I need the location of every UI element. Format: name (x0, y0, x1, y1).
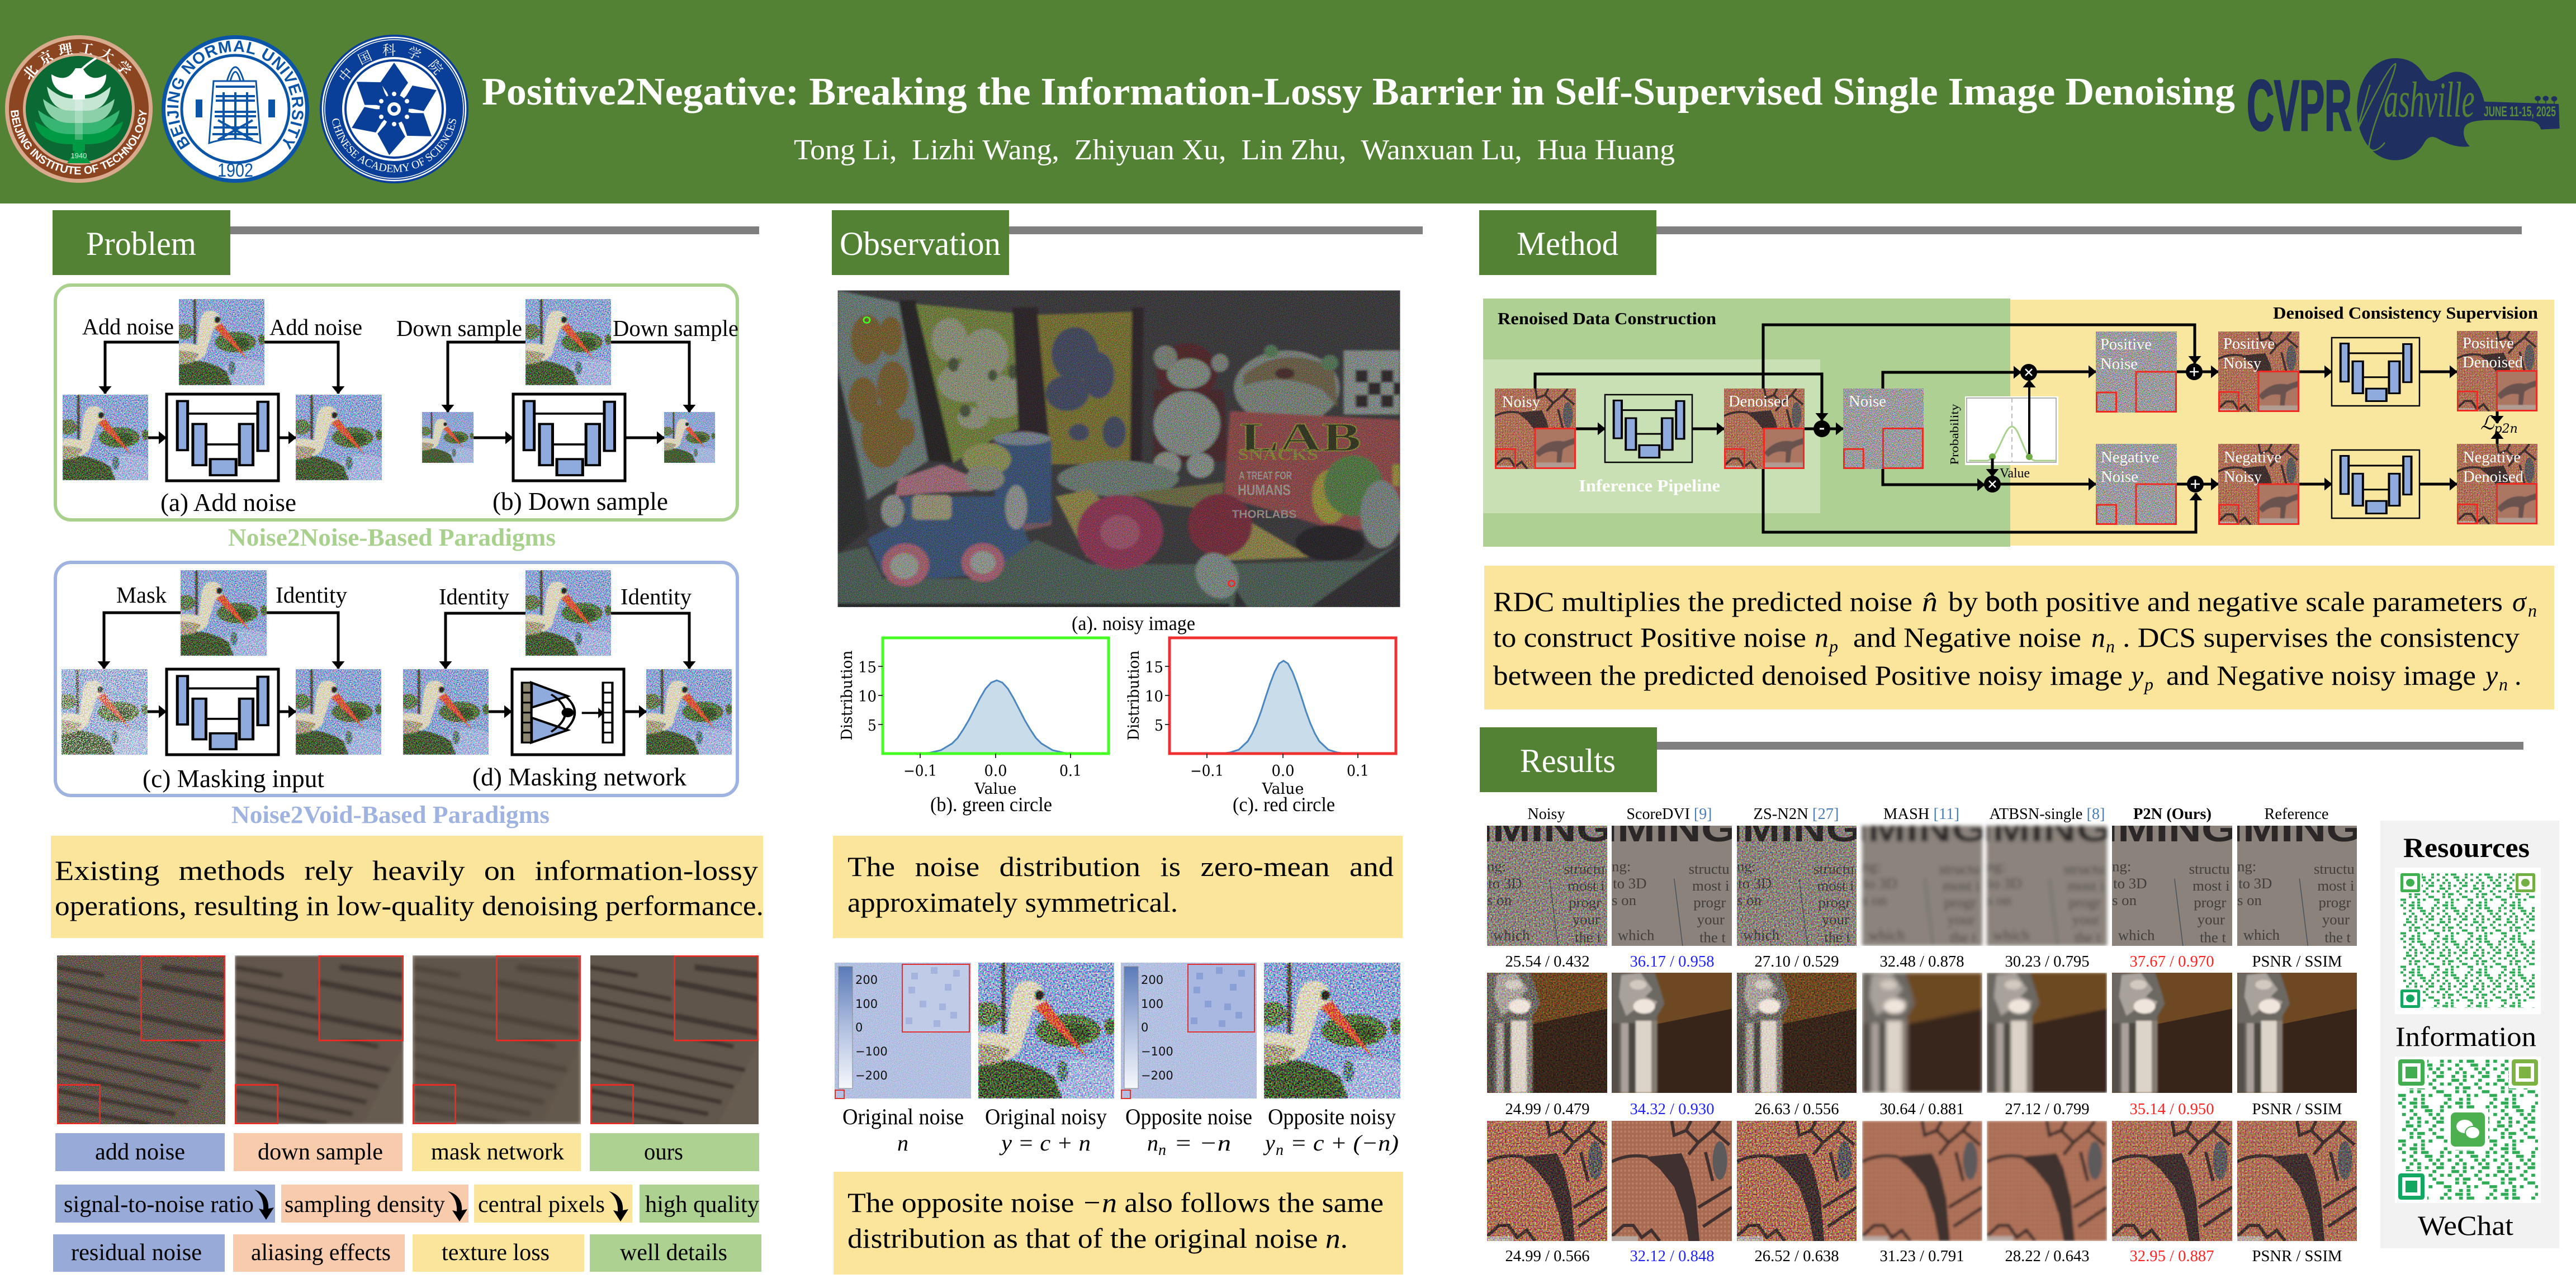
results row 2: screw (1487, 973, 2357, 1118)
QR code: WeChat (2395, 1057, 2541, 1203)
results row 2: screw: 35.14 / 0.950 (2130, 1100, 2214, 1118)
callout: existing methods: Existing methods rely heavily on information-lossy (55, 855, 758, 886)
image: original noise: 100 (855, 997, 878, 1011)
labels: method names (55, 1133, 759, 1171)
results row 3: fabric: 24.99 / 0.566 (1505, 1247, 1590, 1265)
tile labels: Positive (2100, 336, 2152, 353)
logo: Chinese Academy of Sciences: CHINESE ACADEMY OF SCIENCES (329, 117, 460, 175)
image: opposite noise: 200 (1141, 973, 1163, 987)
chart: green circle distribution: 5 (868, 717, 877, 735)
tile labels: Noisy (2223, 355, 2261, 372)
chart: green circle distribution: −0.1 (903, 763, 937, 780)
image: opposite noise: −200 (1141, 1069, 1173, 1082)
operators (1813, 363, 2204, 493)
callout: method description (1484, 566, 2554, 709)
image: original noise: 200 (855, 973, 878, 987)
header band (0, 0, 2576, 203)
captions: noise images: n (897, 1130, 908, 1156)
logo: CVPR Nashville guitar (2247, 58, 2560, 160)
captions: noise images: Original noisy (985, 1104, 1107, 1129)
callout: method description: n (1815, 622, 1829, 653)
section: Method (1479, 210, 2554, 709)
panel: Noise2Void paradigms (55, 562, 738, 795)
diagram: masking input: Identity (276, 582, 347, 608)
section: Results (1480, 727, 2559, 1265)
tile labels: Negative (2101, 449, 2159, 466)
diagram: masking network: Identity (439, 584, 509, 609)
callout: existing methods: operations, resulting in low-quality denoising performance. (55, 890, 764, 921)
chart: green circle distribution: 10 (858, 688, 877, 705)
results row 1: paper: 37.67 / 0.970 (2130, 953, 2214, 970)
labels: effects: residual noise (71, 1240, 202, 1266)
results row 2: screw: 26.63 / 0.556 (1754, 1100, 1839, 1118)
results row 1: paper: 32.48 / 0.878 (1879, 953, 1964, 970)
column headers: ATBSN-single [8] (1989, 806, 2105, 823)
caption: Noise2Void-Based Paradigms: Noise2Void-Based Paradigms (231, 801, 550, 828)
panel: Noise2Noise paradigms (55, 285, 738, 520)
callout: method description: RDC multiplies the predicted noise (1493, 586, 1912, 617)
tile labels: Noise (2100, 356, 2138, 373)
callout: opposite noise: The opposite noise −n also follows the same (847, 1187, 1384, 1218)
column headers: ScoreDVI [9] (1627, 806, 1712, 823)
heading: Observation: Observation (840, 225, 1001, 262)
column headers: MASH [11] (1883, 806, 1959, 823)
caption: chart b: (b). green circle (930, 793, 1052, 816)
chart: probability curve (1948, 380, 2058, 481)
label: Inference Pipeline: Inference Pipeline (1579, 476, 1720, 495)
QR code: information (2395, 868, 2541, 1014)
diagram: masking input: Mask (116, 582, 167, 608)
heading: Problem (53, 210, 759, 275)
label: loss: p2n (2494, 422, 2518, 436)
panel: Renoised Data Construction (1483, 299, 2010, 547)
callout: method description: between the predicted denoised Positive noisy image (1493, 660, 2123, 691)
chart: probability curve: Value (2000, 466, 2030, 481)
chart: green circle distribution: Value (974, 780, 1016, 798)
tile labels: Noisy (1502, 394, 1540, 411)
diagram: masking input: (c) Masking input (143, 765, 324, 793)
panel: resources (2380, 821, 2559, 1248)
chart: red circle distribution: Value (1262, 780, 1304, 798)
callout: method description: p (1828, 636, 1838, 656)
callout: opposite noise: distribution as that of the original noise n. (847, 1223, 1348, 1254)
results row 3: fabric: PSNR / SSIM (2252, 1247, 2342, 1265)
image: original noise (835, 963, 971, 1098)
diagram: down sample: Down sample (396, 315, 522, 341)
section: Observation (832, 210, 1423, 1275)
logo: CVPR Nashville guitar: CVPR (2247, 66, 2352, 146)
results row 2: screw: 34.32 / 0.930 (1630, 1100, 1714, 1118)
tile labels: Positive (2463, 335, 2514, 352)
results row 1: paper (1480, 809, 2362, 970)
captions: noise images: n (1276, 1142, 1284, 1159)
tile labels: Negative (2463, 449, 2521, 466)
labels: method names: down sample (258, 1139, 383, 1165)
tile labels: Noisy (2224, 468, 2262, 486)
heading: Problem: Problem (86, 225, 196, 262)
logo: Beijing Normal University: 1902 (217, 160, 253, 181)
callout: opposite noise (834, 1172, 1403, 1275)
results row 3: fabric (1487, 1121, 2357, 1265)
logo: Beijing Institute of Technology: 北京理工大学 (23, 42, 132, 79)
results row 3: fabric: 32.12 / 0.848 (1630, 1247, 1714, 1265)
captions: noise images: Opposite noise (1125, 1104, 1252, 1129)
chart: green circle distribution: 15 (858, 659, 877, 676)
labels: causes: central pixels (478, 1192, 605, 1218)
diagram: add noise: Add noise (269, 314, 362, 340)
title: Positive2Negative: Breaking the Information-Lossy Barrier in Self-Supervised Single Image Denoising (482, 70, 2235, 113)
labels: effects: aliasing effects (251, 1240, 391, 1266)
logo: Beijing Institute of Technology: 1940 (71, 151, 87, 160)
heading: Resources: Resources (2403, 832, 2530, 863)
chart: probability curve: Probability (1948, 404, 1961, 465)
tile labels: Positive (2223, 335, 2275, 353)
tile labels: Negative (2224, 449, 2281, 466)
logo: Beijing Normal University: BEIJING NORMAL UNIVERSITY (167, 40, 304, 150)
callout: method description: . DCS supervises the consistency (2123, 622, 2520, 653)
labels: causes: high quality (645, 1192, 759, 1218)
column headers (1527, 806, 2329, 823)
section: Problem (51, 210, 764, 1272)
tile labels: Noise (1849, 393, 1886, 410)
callout: method description: n (2528, 600, 2537, 621)
results row 1: paper: 25.54 / 0.432 (1505, 953, 1590, 970)
captions: noise images: y (1263, 1130, 1275, 1156)
labels: method names: add noise (95, 1139, 185, 1165)
results row 3: fabric: 32.95 / 0.887 (2130, 1247, 2214, 1265)
logo: Chinese Academy of Sciences (320, 35, 468, 183)
results row 2: screw: 27.12 / 0.799 (2005, 1100, 2090, 1118)
image: opposite noise: 0 (1141, 1021, 1148, 1034)
photo: noisy image: SNACKS (1238, 447, 1318, 463)
chart: green circle distribution: 0.1 (1059, 763, 1082, 780)
callout: noise distribution: The noise distribution is zero-mean and (847, 851, 1394, 882)
column headers: P2N (Ours) (2133, 806, 2212, 823)
diagram: down sample (396, 299, 738, 515)
chart: red circle distribution: 0.0 (1271, 763, 1295, 780)
label: loss: ℒ (2480, 412, 2494, 434)
tile labels (1502, 335, 2523, 486)
tile labels: Noise (2101, 468, 2138, 486)
photo: noisy image: THORLABS (1232, 508, 1296, 520)
tile labels: Denoised (1729, 393, 1789, 410)
caption: noisy image: (a). noisy image (1072, 612, 1195, 634)
photo: noisy image: HUMANS (1238, 482, 1291, 498)
callout: method description: n (2499, 674, 2508, 694)
labels: causes (55, 1185, 759, 1223)
image: opposite noise (1121, 963, 1257, 1098)
results row 1: paper: PSNR / SSIM (2252, 953, 2342, 970)
logo: CVPR Nashville guitar: ashville (2384, 72, 2475, 127)
comparison images (57, 955, 759, 1124)
callout: noise distribution (833, 836, 1403, 938)
heading: Results: Results (1520, 742, 1616, 779)
diagram: masking network (399, 570, 738, 791)
diagram: add noise (58, 299, 389, 517)
callout: method description: y (2483, 660, 2498, 691)
captions: noise images: = c + (−n) (1290, 1130, 1399, 1156)
callout: method description: n̂ (1922, 586, 1938, 617)
image: opposite noise: −100 (1141, 1045, 1173, 1058)
heading: Results (1480, 727, 2523, 792)
captions: noise images: y = c + n (999, 1130, 1091, 1156)
results row 1: paper: 27.10 / 0.529 (1754, 953, 1839, 970)
label: WeChat: WeChat (2418, 1210, 2513, 1241)
image: original noisy (972, 963, 1125, 1107)
caption: chart c: (c). red circle (1233, 793, 1335, 816)
captions: noise images: = −n (1174, 1130, 1231, 1156)
results row 3: fabric: 26.52 / 0.638 (1754, 1247, 1839, 1265)
results row 1: paper: 36.17 / 0.958 (1630, 953, 1714, 970)
diagram: masking network: Identity (621, 584, 692, 609)
callout: method description: . (2515, 660, 2521, 691)
heading: Method (1479, 210, 2522, 275)
callout: method description: p (2143, 674, 2153, 694)
chart: green circle distribution: 0.0 (984, 763, 1007, 780)
column headers: Reference (2264, 806, 2329, 823)
image: opposite noisy (1257, 963, 1412, 1107)
labels: effects: well details (620, 1240, 727, 1266)
panel: Inference Pipeline (1483, 359, 1820, 513)
results row 2: screw: PSNR / SSIM (2252, 1100, 2342, 1118)
logo: Beijing Institute of Technology (5, 35, 153, 183)
heading: Method: Method (1517, 225, 1618, 262)
results row 3: fabric: 31.23 / 0.791 (1879, 1247, 1964, 1265)
diagram: pipeline (1483, 299, 2554, 547)
callout: method description: σ (2512, 586, 2527, 617)
photo: noisy image (838, 291, 1401, 607)
callout: existing methods (51, 836, 764, 938)
diagram: masking network: (d) Masking network (472, 763, 686, 791)
labels: method names: ours (644, 1139, 683, 1165)
callout: method description: by both positive and negative scale parameters (1948, 586, 2503, 617)
chart: green circle distribution (839, 638, 1109, 798)
labels: method names: mask network (431, 1139, 564, 1165)
captions: noise images: n (1158, 1142, 1166, 1159)
results row 2: screw: 30.64 / 0.881 (1879, 1100, 1964, 1118)
diagram: add noise: Add noise (82, 314, 174, 339)
results row 3: fabric: 28.22 / 0.643 (2005, 1247, 2090, 1265)
panel: Denoised Consistency Supervision (2010, 300, 2554, 546)
image: opposite noise: 100 (1141, 997, 1163, 1011)
diagram: down sample: Down sample (613, 315, 738, 341)
tile labels: Denoised (2463, 468, 2523, 486)
callout: method description: n (2106, 636, 2115, 656)
logo: Chinese Academy of Sciences: 中国科学院 (333, 39, 455, 86)
diagram: add noise: (a) Add noise (160, 489, 296, 517)
labels: causes: signal-to-noise ratio (64, 1192, 254, 1218)
diagram: masking input (57, 570, 388, 793)
callout: method description: y (2128, 660, 2144, 691)
heading: Renoised Data Construction: Renoised Data Construction (1498, 309, 1716, 328)
icon: WeChat (2451, 1112, 2485, 1147)
chart: red circle distribution: Distribution (1125, 651, 1143, 740)
caption: Noise2Noise-Based Paradigms: Noise2Noise-Based Paradigms (228, 524, 556, 551)
tiles: image patches (1495, 331, 2537, 525)
captions: noise images: Original noise (842, 1104, 964, 1129)
chart: red circle distribution: −0.1 (1190, 763, 1224, 780)
chart: red circle distribution: 0.1 (1347, 763, 1369, 780)
results row 1: paper: 30.23 / 0.795 (2005, 953, 2090, 970)
chart: red circle distribution (1125, 638, 1396, 798)
callout: method description: to construct Positive noise (1493, 622, 1806, 653)
column headers: ZS-N2N [27] (1753, 806, 1839, 823)
chart: red circle distribution: 10 (1145, 688, 1163, 705)
logo: Beijing Institute of Technology: BEIJING INSTITUTE OF TECHNOLOGY (11, 110, 146, 174)
heading: Observation (832, 210, 1423, 275)
chart: red circle distribution: 15 (1145, 659, 1163, 676)
chart: green circle distribution: Distribution (839, 651, 856, 740)
heading: Denoised Consistency Supervision: Denoised Consistency Supervision (2273, 303, 2538, 323)
chart: red circle distribution: 5 (1154, 717, 1163, 735)
diagram: down sample: (b) Down sample (493, 487, 668, 515)
captions: noise images: Opposite noisy (1268, 1104, 1396, 1129)
results row 2: screw: 24.99 / 0.479 (1505, 1100, 1590, 1118)
image: original noise: −200 (855, 1069, 888, 1082)
networks: U-Nets (1605, 338, 2419, 518)
column headers: Noisy (1527, 806, 1565, 823)
captions: noise images (842, 1104, 1399, 1159)
tile labels: Denoised (2463, 354, 2523, 371)
connectors (1535, 325, 2497, 532)
photo: noisy image: LAB (1240, 414, 1361, 460)
image: original noise: −100 (855, 1045, 888, 1058)
labels: causes: sampling density (285, 1192, 445, 1218)
callout: method description: and Negative noise (1853, 622, 2081, 653)
image: original noise: 0 (855, 1021, 863, 1034)
icon: masking network (522, 683, 612, 742)
callout: method description: n (2091, 622, 2105, 653)
callout: noise distribution: approximately symmetrical. (847, 887, 1178, 918)
photo: noisy image: A TREAT FOR (1239, 470, 1292, 482)
authors: Tong Li, Lizhi Wang, Zhiyuan Xu, Lin Zhu, Wanxuan Lu, Hua Huang (794, 134, 1675, 166)
captions: noise images: n (1147, 1130, 1158, 1156)
labels: effects: texture loss (442, 1240, 550, 1266)
labels: effects (53, 1234, 761, 1272)
callout: method description: and Negative noisy image (2166, 660, 2476, 691)
label: Information: Information (2395, 1021, 2536, 1052)
